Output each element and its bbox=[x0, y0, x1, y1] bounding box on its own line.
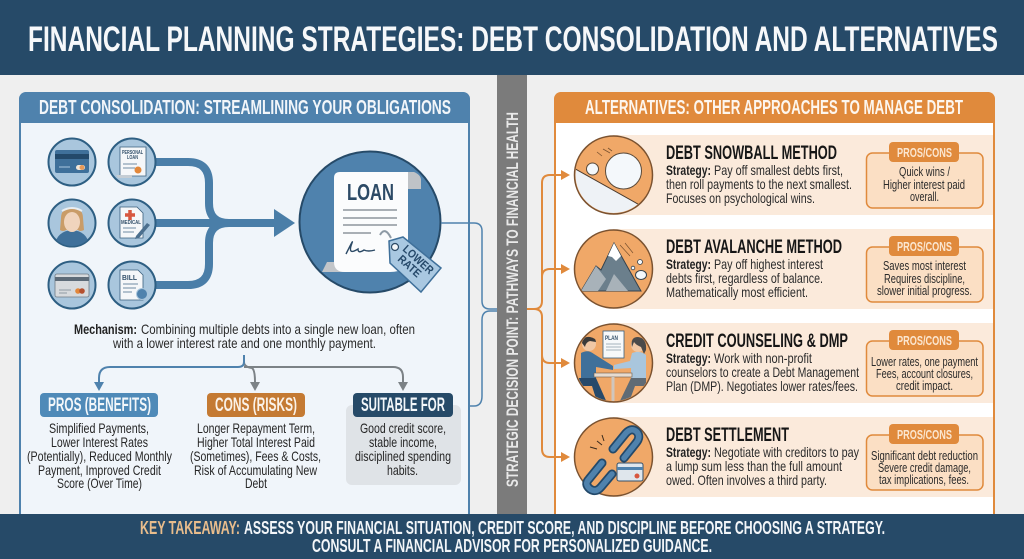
icon: personal loan document: LOAN bbox=[127, 155, 138, 161]
strategy text: debt settlement: owed. Often involves a third party. bbox=[666, 472, 827, 488]
strategy text: debt snowball bbox=[666, 162, 852, 206]
mechanism text: with a lower interest rate and one monthly payment. bbox=[112, 335, 376, 351]
pros/cons box: debt snowball: overall. bbox=[910, 190, 939, 204]
pros/cons box: credit counseling: Lower rates, one payment bbox=[871, 355, 978, 369]
mechanism text bbox=[74, 321, 415, 351]
strategy text: credit counseling: Plan (DMP). Negotiates lower rates/fees. bbox=[666, 378, 858, 394]
pros/cons box: debt settlement bbox=[866, 424, 983, 490]
strategy text: debt settlement bbox=[666, 444, 859, 488]
branching arrows bbox=[94, 355, 408, 391]
card: suitable for bbox=[346, 393, 461, 485]
strategy text: debt settlement: a lump sum less than the full amount bbox=[666, 458, 842, 474]
lower rate tag: RATE bbox=[395, 253, 423, 280]
strategy text: credit counseling: Strategy: bbox=[666, 350, 711, 366]
strategy text: debt settlement: Strategy: bbox=[666, 444, 711, 460]
pros/cons box: debt avalanche: Requires discipline, bbox=[884, 272, 965, 286]
key takeaway banner: KEY TAKEAWAY: bbox=[140, 518, 240, 538]
icon: medical bill: MEDICAL bbox=[121, 220, 142, 226]
row: credit counseling bbox=[574, 323, 993, 405]
connector lines to decision point bbox=[441, 223, 498, 406]
row: debt snowball bbox=[574, 135, 993, 215]
panel heading: alternatives bbox=[554, 92, 995, 123]
panel: alternatives bbox=[554, 92, 995, 533]
icon: personal loan document bbox=[108, 138, 156, 186]
pros/cons box: debt settlement: PROS/CONS bbox=[897, 427, 952, 442]
strategy text: credit counseling: Work with non-profit bbox=[714, 350, 812, 366]
icon: broken chain bbox=[574, 418, 652, 496]
strategy text: debt snowball: then roll payments to the next smallest. bbox=[666, 176, 852, 192]
pros/cons box: debt snowball: Higher interest paid bbox=[883, 178, 965, 192]
lower rate tag bbox=[389, 237, 441, 292]
pros/cons box: debt settlement: Significant debt reduction bbox=[871, 449, 978, 463]
strategy text: debt snowball: Strategy: bbox=[666, 162, 711, 178]
icon: counseling meeting: PLAN bbox=[605, 335, 618, 342]
card: pros: PROS (BENEFITS) bbox=[48, 395, 151, 416]
strategy text: debt snowball: Focuses on psychological wins. bbox=[666, 190, 815, 206]
card: suitable for: SUITABLE FOR bbox=[361, 395, 445, 416]
icon: consolidated loan with lower rate tag bbox=[300, 152, 441, 292]
mechanism text: Mechanism: bbox=[74, 321, 137, 337]
heading: debt snowball: DEBT SNOWBALL METHOD bbox=[666, 143, 837, 164]
center strip: strategic decision point bbox=[497, 75, 527, 515]
icon: credit card bbox=[48, 138, 96, 186]
strategy text: debt snowball: Pay off smallest debts first, bbox=[714, 162, 843, 178]
merging arrows bbox=[154, 162, 295, 285]
strategy text: debt avalanche: Mathematically most efficient. bbox=[666, 284, 808, 300]
strategy text: debt settlement: Negotiate with creditors to pay bbox=[714, 444, 859, 460]
card: pros: Score (Over Time) bbox=[57, 475, 142, 491]
icon: person bbox=[48, 200, 96, 248]
card: cons: Risk of Accumulating New bbox=[194, 462, 318, 478]
title banner bbox=[0, 0, 1024, 75]
pros/cons box: credit counseling bbox=[866, 330, 983, 396]
card: pros: Payment, Improved Credit bbox=[38, 462, 161, 478]
card: pros bbox=[27, 393, 172, 491]
pros/cons box: debt avalanche: PROS/CONS bbox=[897, 239, 952, 254]
icon: bill bbox=[108, 262, 156, 308]
pros/cons box: debt avalanche: slower initial progress. bbox=[877, 284, 972, 298]
heading: credit counseling: CREDIT COUNSELING & DMP bbox=[666, 331, 848, 352]
row: debt settlement bbox=[574, 417, 993, 497]
card: suitable for: disciplined spending bbox=[355, 448, 451, 464]
orange pathway arrows bbox=[527, 170, 570, 462]
card: cons: Debt bbox=[245, 475, 267, 491]
card: suitable for: Good credit score, bbox=[360, 420, 446, 436]
strategy text: debt avalanche: Strategy: bbox=[666, 256, 711, 272]
pros/cons box: debt settlement: tax implications, fees. bbox=[879, 473, 969, 487]
row: debt avalanche bbox=[574, 229, 993, 309]
icon: mountain avalanche bbox=[574, 230, 652, 308]
strategy text: credit counseling: counselors to create a Debt Management bbox=[666, 364, 859, 380]
icon: consolidated loan with lower rate tag: LOAN bbox=[347, 179, 394, 205]
card: cons: Longer Repayment Term, bbox=[197, 420, 315, 436]
card: pros: Simplified Payments, bbox=[49, 420, 149, 436]
pros/cons box: credit counseling: Fees, account closures, bbox=[876, 367, 973, 381]
key takeaway banner bbox=[0, 514, 1024, 559]
strategy text: credit counseling bbox=[666, 350, 859, 394]
card: pros: (Potentially), Reduced Monthly bbox=[27, 448, 172, 464]
mechanism text: Combining multiple debts into a single new loan, often bbox=[141, 321, 415, 337]
strategy text: debt avalanche: Pay off highest interest bbox=[714, 256, 823, 272]
icon: bill: BILL bbox=[122, 275, 138, 282]
panel heading: debt consolidation: DEBT CONSOLIDATION: STREAMLINING YOUR OBLIGATIONS bbox=[39, 97, 451, 119]
card: cons bbox=[190, 393, 321, 491]
lower rate tag: LOWER bbox=[400, 243, 436, 277]
pros/cons box: debt snowball: PROS/CONS bbox=[897, 145, 952, 160]
pros/cons box: credit counseling: credit impact. bbox=[896, 379, 953, 393]
card: suitable for: stable income, bbox=[369, 434, 437, 450]
pros/cons box: debt avalanche: Saves most interest bbox=[883, 259, 966, 273]
pros/cons box: debt settlement: Severe credit damage, bbox=[878, 461, 971, 475]
pros/cons box: debt snowball bbox=[866, 142, 983, 208]
card: cons: CONS (RISKS) bbox=[215, 395, 297, 416]
strategy text: debt avalanche: debts first, regardless of balance. bbox=[666, 270, 823, 286]
icon: personal loan document: PERSONAL bbox=[122, 150, 143, 156]
card: suitable for: habits. bbox=[387, 462, 418, 478]
icon: medical bill bbox=[108, 200, 156, 246]
panel heading: debt consolidation bbox=[19, 92, 470, 123]
card: cons: Higher Total Interest Paid bbox=[197, 434, 315, 450]
key takeaway banner: CONSULT A FINANCIAL ADVISOR FOR PERSONALIZED GUIDANCE. bbox=[312, 536, 712, 556]
panel: debt consolidation bbox=[19, 92, 470, 533]
card: cons: (Sometimes), Fees & Costs, bbox=[190, 448, 321, 464]
heading: debt avalanche: DEBT AVALANCHE METHOD bbox=[666, 237, 842, 258]
icon: counseling meeting bbox=[574, 324, 652, 405]
pros/cons box: debt snowball: Quick wins / bbox=[899, 165, 950, 179]
card: pros: Lower Interest Rates bbox=[51, 434, 148, 450]
icon: grey credit card bbox=[48, 262, 96, 308]
pros/cons box: debt avalanche bbox=[866, 236, 983, 302]
strategy text: debt avalanche bbox=[666, 256, 823, 300]
pros/cons box: credit counseling: PROS/CONS bbox=[897, 333, 952, 348]
heading: debt settlement: DEBT SETTLEMENT bbox=[666, 425, 789, 446]
icon: snowball bbox=[574, 135, 654, 215]
